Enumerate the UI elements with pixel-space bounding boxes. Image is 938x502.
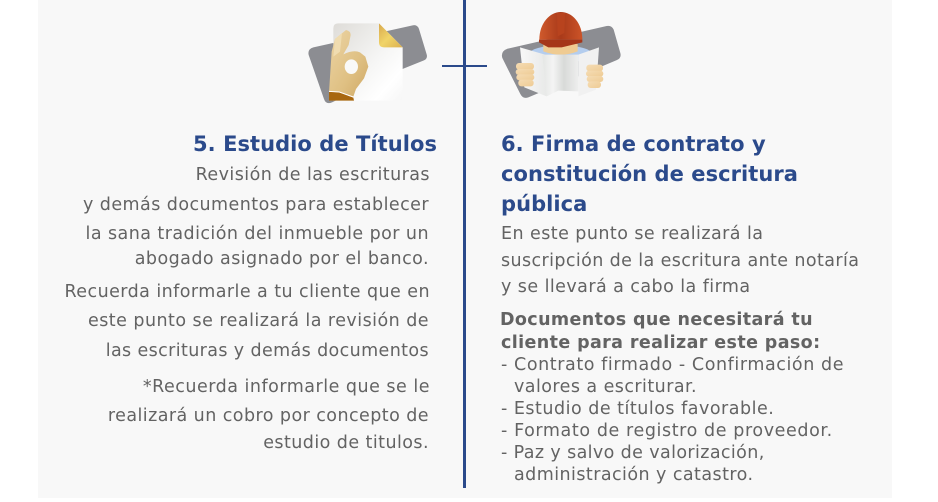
heading: 6. Firma de contrato: 6. Firma de contrato y: [501, 132, 766, 156]
documents list: - Paz y salvo de valorización,: [501, 443, 765, 463]
text block: en este punto: En este punto se realizará la: [501, 224, 763, 244]
heading: 6. Firma de contrato: pública: [501, 192, 587, 216]
documents list: Documentos que necesitará tu: [500, 310, 813, 330]
text block: en este punto: suscripción de la escritura ante notaría: [501, 251, 859, 271]
timeline vertical line: [463, 0, 466, 488]
documents list: - Contrato firmado - Confirmación de: [501, 355, 844, 375]
icon: worker with helmet reading plan: [502, 12, 621, 98]
text block: en este punto: [501, 224, 859, 297]
text block: cobro: [108, 377, 430, 453]
text block: revisión: abogado asignado por el banco.: [135, 249, 429, 269]
right hand: [586, 65, 603, 88]
text block: recuerda: este punto se realizará la revisión de: [88, 311, 429, 331]
text block: recuerda: las escrituras y demás documentos: [106, 341, 429, 361]
text block: cobro: *Recuerda informarle que se le: [143, 377, 430, 397]
heading: 5. Estudio de Títulos: 5. Estudio de Títulos: [193, 132, 437, 156]
documents list: cliente para realizar este paso:: [501, 333, 820, 353]
documents list: administración y catastro.: [514, 465, 753, 485]
text block: revisión: [83, 165, 430, 269]
timeline connector: [442, 65, 487, 67]
heading: 6. Firma de contrato: constitución de escritura: [501, 162, 798, 186]
text block: revisión: y demás documentos para establecer: [83, 195, 429, 215]
left hand: [516, 63, 534, 86]
text block: en este punto: y se llevará a cabo la firma: [501, 277, 751, 297]
heading: 6. Firma de contrato: [501, 132, 798, 216]
icon: hand OK over document: [308, 24, 427, 104]
text block: revisión: la sana tradición del inmueble por un: [86, 224, 429, 244]
documents list: - Estudio de títulos favorable.: [501, 399, 774, 419]
documents list: valores a escriturar.: [514, 377, 697, 397]
documents list: - Formato de registro de proveedor.: [501, 421, 833, 441]
text block: revisión: Revisión de las escrituras: [196, 165, 430, 185]
text block: cobro: estudio de titulos.: [263, 433, 429, 453]
text block: recuerda: Recuerda informarle a tu cliente que en: [64, 282, 430, 302]
text block: cobro: realizará un cobro por concepto de: [108, 406, 429, 426]
documents list: [500, 310, 844, 485]
text block: recuerda: [64, 282, 430, 361]
